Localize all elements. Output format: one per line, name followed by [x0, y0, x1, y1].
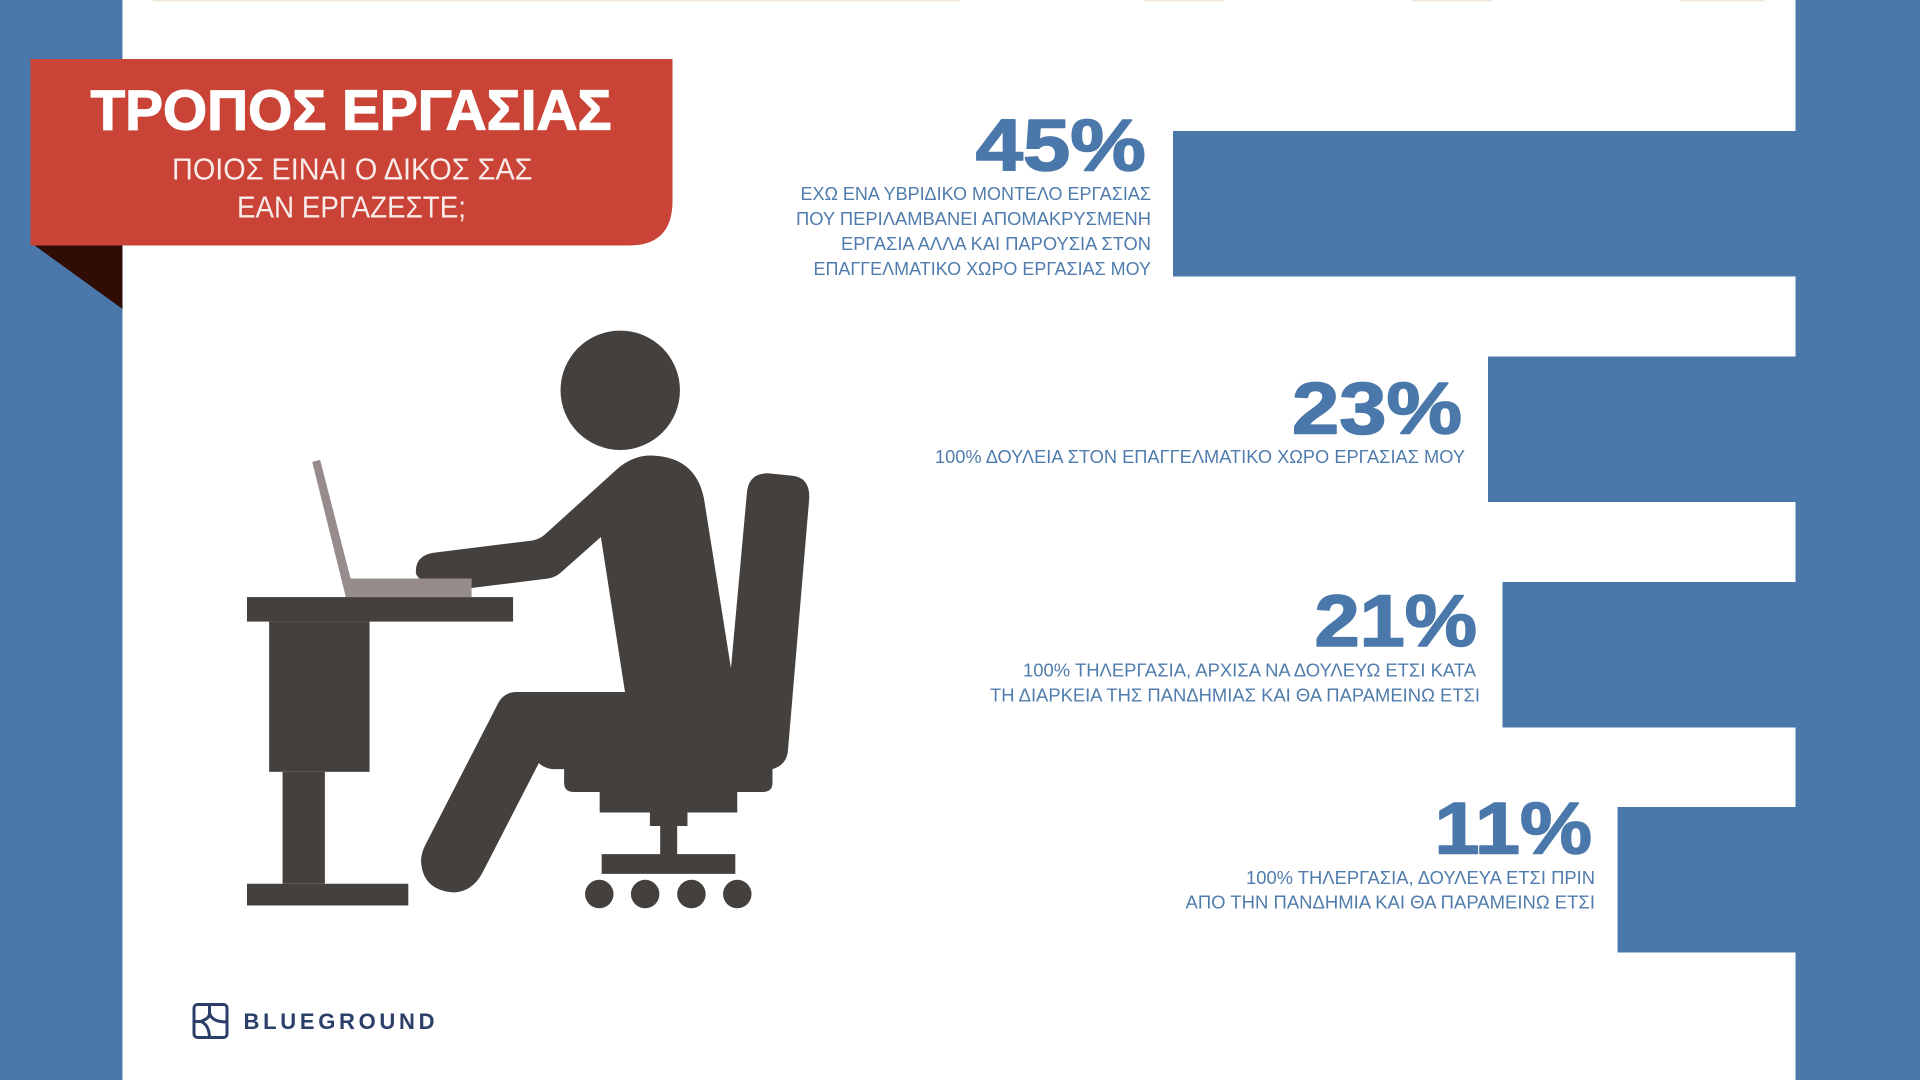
body and chair [416, 456, 809, 892]
chair wheels [585, 880, 752, 908]
logo icon [194, 1004, 227, 1038]
value 45%: 45% [976, 106, 1146, 186]
subtitle: ΕΑΝ ΕΡΓΑΖΕΣΤΕ; [237, 190, 466, 224]
description 23%: 100% ΔΟΥΛΕΙΑ ΣΤΟΝ ΕΠΑΓΓΕΛΜΑΤΙΚΟ ΧΩΡΟ ΕΡΓΑΣΙΑΣ ΜΟΥ [935, 447, 1465, 467]
logo: Blueground [194, 1004, 434, 1038]
description 45%: ΕΡΓΑΣΙΑ ΑΛΛΑ ΚΑΙ ΠΑΡΟΥΣΙΑ ΣΤΟΝ [841, 234, 1151, 254]
title: ΤΡΟΠΟΣ ΕΡΓΑΣΙΑΣ [90, 78, 612, 142]
value 11%: 11% [1434, 788, 1592, 870]
subtitle: ΠΟΙΟΣ ΕΙΝΑΙ Ο ΔΙΚΟΣ ΣΑΣ [172, 152, 532, 186]
description 21%: ΤΗ ΔΙΑΡΚΕΙΑ ΤΗΣ ΠΑΝΔΗΜΙΑΣ ΚΑΙ ΘΑ ΠΑΡΑΜΕΙΝΩ ΕΤΣΙ [990, 686, 1480, 706]
item: 11% remote before pandemic [1186, 788, 1796, 952]
description 11%: ΑΠΟ ΤΗΝ ΠΑΝΔΗΜΙΑ ΚΑΙ ΘΑ ΠΑΡΑΜΕΙΝΩ ΕΤΣΙ [1186, 892, 1595, 912]
bar 23% [1488, 356, 1796, 502]
description 21% [990, 660, 1480, 706]
head [561, 331, 680, 450]
banner fold [34, 245, 122, 309]
icon: person working at a desk on a laptop [247, 331, 809, 908]
title banner [30, 59, 672, 309]
bar 11% [1618, 807, 1796, 952]
desk [247, 597, 513, 905]
item: 45% hybrid [796, 106, 1796, 279]
description 21%: 100% ΤΗΛΕΡΓΑΣΙΑ, ΑΡΧΙΣΑ ΝΑ ΔΟΥΛΕΥΩ ΕΤΣΙ ΚΑΤΑ [1023, 660, 1476, 680]
bar 21% [1502, 582, 1796, 728]
left blue band [0, 0, 122, 1080]
description 45%: ΠΟΥ ΠΕΡΙΛΑΜΒΑΝΕΙ ΑΠΟΜΑΚΡΥΣΜΕΝΗ [796, 209, 1151, 229]
logo wordmark: BLUEGROUND [244, 1009, 434, 1034]
item: 21% remote since pandemic [990, 581, 1796, 728]
description 45%: ΕΠΑΓΓΕΛΜΑΤΙΚΟ ΧΩΡΟ ΕΡΓΑΣΙΑΣ ΜΟΥ [814, 259, 1151, 279]
bar 45% [1173, 131, 1796, 276]
right blue band [1796, 0, 1920, 1080]
banner shape [30, 59, 672, 246]
description 45%: ΕΧΩ ΕΝΑ ΥΒΡΙΔΙΚΟ ΜΟΝΤΕΛΟ ΕΡΓΑΣΙΑΣ [800, 184, 1151, 204]
subtitle [172, 152, 532, 224]
value 21%: 21% [1314, 581, 1477, 662]
item: 23% office [935, 356, 1796, 502]
value 23%: 23% [1292, 368, 1462, 450]
laptop [312, 460, 472, 597]
description 11% [1186, 868, 1595, 912]
description 45% [796, 184, 1151, 279]
description 11%: 100% ΤΗΛΕΡΓΑΣΙΑ, ΔΟΥΛΕΥΑ ΕΤΣΙ ΠΡΙΝ [1246, 868, 1595, 888]
